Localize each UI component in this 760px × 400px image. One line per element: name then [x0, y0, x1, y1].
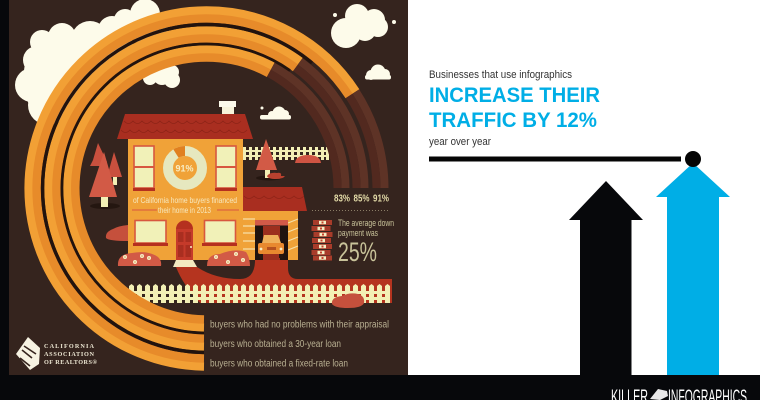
cloud: top right [331, 4, 396, 48]
cloud: small right [365, 64, 391, 80]
front fence [128, 284, 390, 303]
house [117, 101, 253, 267]
chimney [219, 101, 236, 115]
doorstep [173, 260, 197, 267]
arc legend labels: buyers who obtained a fixed-rate loan [210, 358, 348, 370]
black rule [429, 156, 681, 162]
black arrow [569, 181, 643, 376]
down payment stat [338, 218, 394, 267]
arc: 83% no appraisal problems [67, 49, 345, 327]
bush: behind fence [295, 155, 321, 163]
left black edge [0, 0, 9, 400]
percent labels [334, 194, 389, 204]
financed caption: their home in 2013 [158, 205, 211, 215]
arc: 85% 30-year loan [49, 30, 364, 346]
door [176, 220, 193, 260]
cloud: large left [15, 0, 180, 125]
marker dot [685, 151, 701, 167]
financed caption: of California home buyers financed [133, 195, 237, 205]
blue arrow [656, 163, 730, 375]
arc legend labels: buyers who had no problems with their appraisal [210, 320, 389, 330]
bush: left of house [106, 225, 128, 241]
bush: front left [118, 252, 161, 266]
arc legend labels [210, 320, 389, 370]
subtext: year over year [429, 136, 491, 148]
headline [429, 83, 600, 132]
cloud: small centre [260, 106, 291, 120]
garage [243, 187, 307, 260]
footer bar [0, 375, 760, 400]
logo: California Association of Realtors [16, 337, 97, 370]
upper right window [215, 146, 237, 191]
financed caption [132, 195, 239, 215]
driveway [176, 258, 392, 303]
percent labels: 83% [334, 194, 350, 204]
arc legend labels: buyers who obtained a 30-year loan [210, 339, 341, 350]
headline: TRAFFIC BY 12% [429, 108, 597, 132]
lower right window [202, 220, 237, 246]
down payment stat: payment was [338, 228, 378, 239]
intro text: Businesses that use infographics [429, 69, 572, 81]
down payment stat: 25% [338, 237, 377, 267]
percent labels: 85% [354, 194, 370, 204]
bush: front right [207, 250, 250, 266]
logo: California Association of Realtors: ASSOCIATION [44, 351, 95, 358]
car [258, 235, 284, 258]
donut chart: 91% [168, 146, 202, 185]
panel: home buyers [9, 0, 408, 375]
back fence [243, 147, 329, 160]
icon: money stack [312, 220, 332, 260]
logo: California Association of Realtors: OF REALTORS® [44, 359, 97, 366]
headline: INCREASE THEIR [429, 83, 600, 107]
tree: right [256, 139, 285, 180]
bush: fence [332, 293, 364, 308]
trees: left group [89, 143, 122, 209]
donut chart: 91%: 91% [175, 164, 194, 174]
upper left window [133, 146, 155, 191]
logo: California Association of Realtors: CALIFORNIA [44, 343, 95, 350]
footer brand [611, 387, 747, 400]
house body [128, 139, 243, 260]
rainbow arcs chart [29, 10, 384, 366]
percent labels: 91% [373, 194, 389, 204]
roof [117, 114, 253, 139]
arc: 91% fixed-rate loan [29, 10, 384, 366]
lower left window [133, 220, 168, 246]
down payment stat: The average down [338, 218, 394, 229]
